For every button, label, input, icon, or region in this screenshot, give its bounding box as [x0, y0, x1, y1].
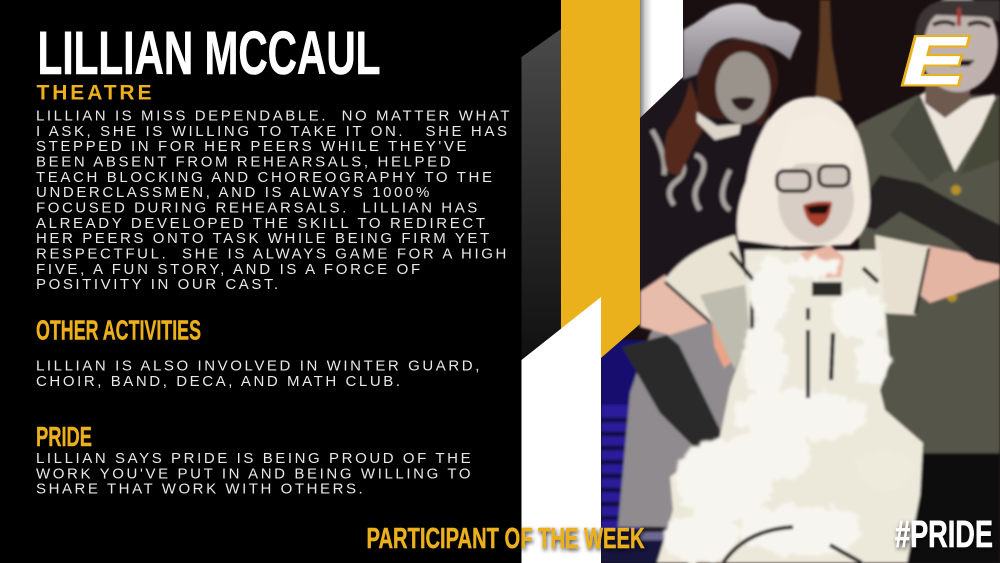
- text block: teacher description: STEPPED IN FOR HER PEERS WHILE THEY'VE: [36, 138, 467, 155]
- right arm skin: [905, 245, 1000, 303]
- icon: school E logo: E: [903, 23, 969, 99]
- text block: other activities: CHOIR, BAND, DECA, AND MATH CLUB.: [36, 373, 400, 390]
- shape: white lower panel: [522, 297, 601, 563]
- text block: teacher description: [36, 108, 509, 293]
- text block: teacher description: ALREADY DEVELOPED THE SKILL TO REDIRECT: [36, 215, 485, 232]
- lead actress: head, wig, glasses: [737, 97, 870, 247]
- bottom lace trim: [723, 330, 862, 563]
- background column: [815, 0, 842, 101]
- text block: teacher description: TEACH BLOCKING AND CHOREOGRAPHY TO THE: [36, 169, 492, 186]
- text block: teacher description: BEEN ABSENT FROM REHEARSALS, HELPED: [36, 154, 451, 170]
- heading: pride: PRIDE: [36, 421, 92, 452]
- text block: pride: SHARE THAT WORK WITH OTHERS.: [36, 481, 363, 498]
- text block: teacher description: LILLIAN IS MISS DEPENDABLE. NO MATTER WHAT: [36, 108, 509, 124]
- text block: other activities: LILLIAN IS ALSO INVOLVED IN WINTER GUARD,: [36, 358, 479, 374]
- shape: grey gradient bar: [522, 29, 561, 360]
- heading: other activities: OTHER ACTIVITIES: [36, 315, 201, 346]
- footer label: participant of the week: PARTICIPANT OF THE WEEK: [366, 523, 645, 555]
- text block: pride: LILLIAN SAYS PRIDE IS BEING PROUD OF THE: [36, 450, 471, 467]
- shape: white top wedge: [640, 0, 683, 118]
- text block: teacher description: RESPECTFUL. SHE IS ALWAYS GAME FOR A HIGH: [36, 246, 506, 262]
- text block: pride: [36, 450, 471, 498]
- text block: pride: WORK YOU'VE PUT IN AND BEING WILLING TO: [36, 465, 471, 482]
- photo: theatre cast on stage: [601, 0, 1000, 563]
- title: student name: LILLIAN MCCAUL: [38, 19, 380, 87]
- text block: teacher description: UNDERCLASSMEN, AND IS ALWAYS 1000%: [36, 184, 429, 201]
- icon: school E logo: E: [903, 23, 969, 99]
- text block: other activities: [36, 358, 479, 390]
- text block: teacher description: HER PEERS ONTO TASK WHILE BEING FIRM YET: [36, 230, 489, 247]
- stage lights at left of the photo: [601, 340, 691, 563]
- man in green uniform: [857, 0, 1000, 563]
- subtitle: activity: THEATRE: [36, 82, 152, 104]
- text block: teacher description: FOCUSED DURING REHEARSALS. LILLIAN HAS: [36, 200, 477, 216]
- woman in hat and black jacket: [618, 3, 801, 528]
- shape: gold vertical band: [561, 0, 640, 358]
- text block: teacher description: POSITIVITY IN OUR CAST.: [36, 276, 278, 293]
- icon: school E logo: [903, 23, 969, 99]
- text block: teacher description: I ASK, SHE IS WILLING TO TAKE IT ON. SHE HAS: [36, 123, 507, 140]
- text block: teacher description: FIVE, A FUN STORY, AND IS A FORCE OF: [36, 261, 420, 278]
- feather boa: [662, 256, 913, 563]
- lead actress: arm and dress: [622, 235, 930, 563]
- black glove, raised arm: [860, 175, 1000, 265]
